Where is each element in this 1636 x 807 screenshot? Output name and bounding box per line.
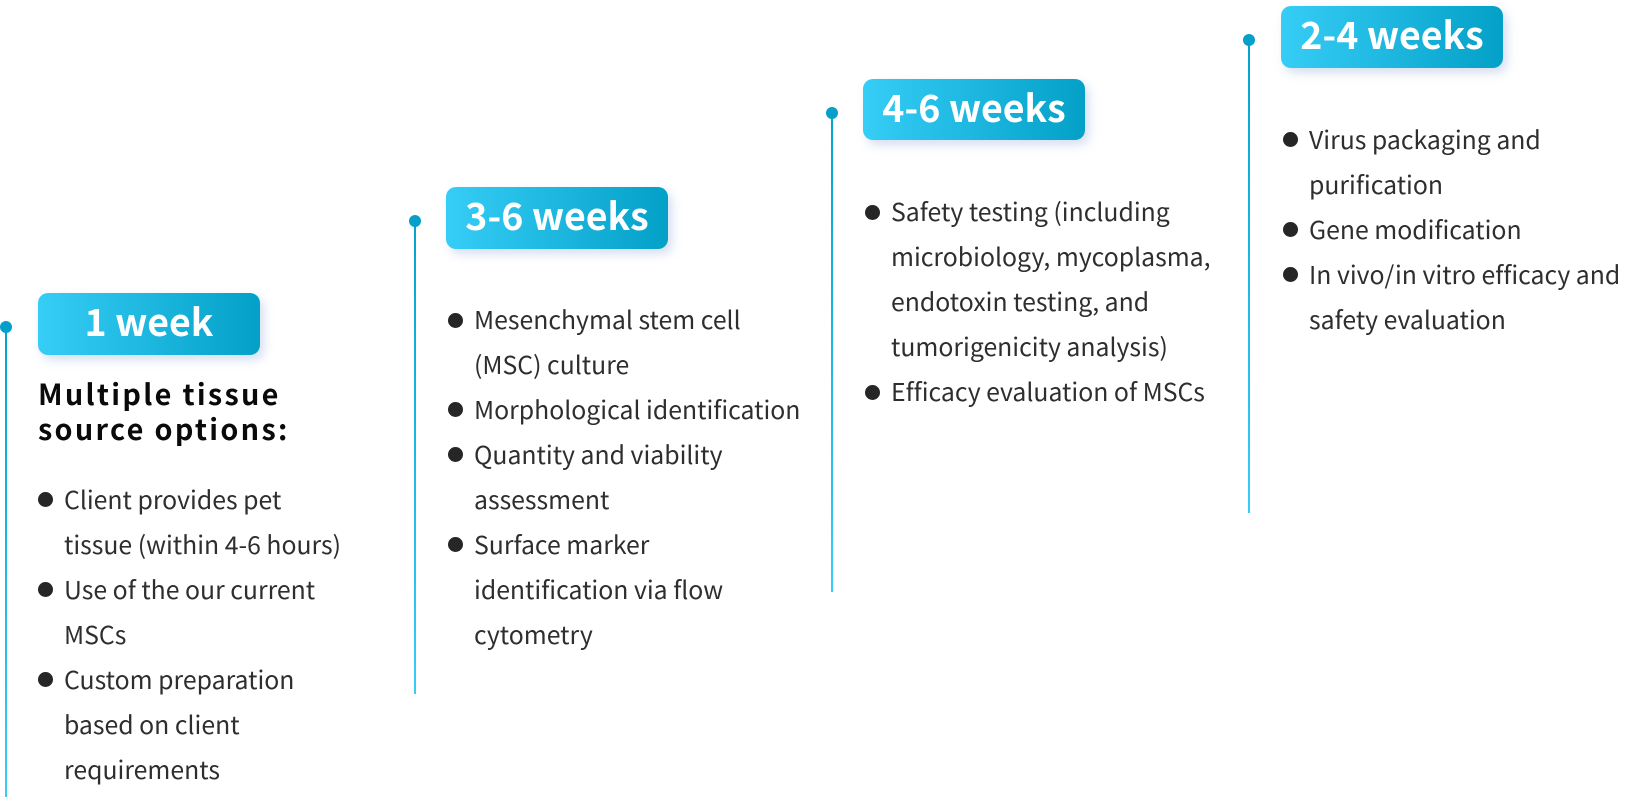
timeline dot xyxy=(1243,34,1255,46)
bullet list: cytometry xyxy=(474,616,593,652)
bullet list: assessment xyxy=(474,481,609,517)
bullet list: Virus packaging and xyxy=(1309,121,1541,157)
bullet list: Use of the our current xyxy=(64,571,315,607)
bullet list: tumorigenicity analysis) xyxy=(891,328,1168,364)
bullet list: endotoxin testing, and xyxy=(891,283,1149,319)
timeline dot xyxy=(826,107,838,119)
heading: source options: xyxy=(38,408,290,449)
bullet list xyxy=(448,301,800,652)
bullet list: Custom preparation xyxy=(64,661,294,697)
bullet list: MSCs xyxy=(64,616,126,652)
stage 3: 4-6 weeks xyxy=(826,78,1211,592)
bullet list: purification xyxy=(1309,166,1443,202)
bullet list xyxy=(38,481,341,787)
bullet list: identification via flow xyxy=(474,571,723,607)
bullet list xyxy=(865,193,1211,409)
bullet list: microbiology, mycoplasma, xyxy=(891,238,1211,274)
stage 1: 1 week xyxy=(0,292,341,797)
duration badge: 4-6 weeks xyxy=(882,78,1066,133)
bullet list: safety evaluation xyxy=(1309,301,1506,337)
bullet list: based on client xyxy=(64,706,240,742)
heading xyxy=(38,373,290,449)
timeline rule xyxy=(831,113,833,592)
bullet list: Efficacy evaluation of MSCs xyxy=(891,373,1205,409)
bullet list: Morphological identification xyxy=(474,391,800,427)
bullet list: Gene modification xyxy=(1309,211,1522,247)
timeline dot xyxy=(0,321,12,333)
timeline rule xyxy=(414,221,416,694)
stage 4: 2-4 weeks xyxy=(1243,5,1620,513)
bullet list: tissue (within 4-6 hours) xyxy=(64,526,341,562)
bullet list: In vivo/in vitro efficacy and xyxy=(1309,256,1620,292)
bullet list xyxy=(1283,121,1620,337)
bullet list: Quantity and viability xyxy=(474,436,723,472)
timeline rule xyxy=(1248,40,1250,513)
timeline dot xyxy=(409,215,421,227)
bullet list: Client provides pet xyxy=(64,481,281,517)
duration badge xyxy=(38,293,260,355)
stage 2: 3-6 weeks xyxy=(409,186,800,694)
bullet list: requirements xyxy=(64,751,220,787)
heading: Multiple tissue xyxy=(38,373,281,414)
bullet list: Mesenchymal stem cell xyxy=(474,301,741,337)
duration badge: 2-4 weeks xyxy=(1300,5,1484,60)
duration badge: 1 week xyxy=(85,292,213,347)
bullet list: Surface marker xyxy=(474,526,649,562)
bullet list: Safety testing (including xyxy=(891,193,1170,229)
duration badge: 3-6 weeks xyxy=(465,186,649,241)
bullet list: (MSC) culture xyxy=(474,346,629,382)
timeline rule xyxy=(5,327,7,797)
